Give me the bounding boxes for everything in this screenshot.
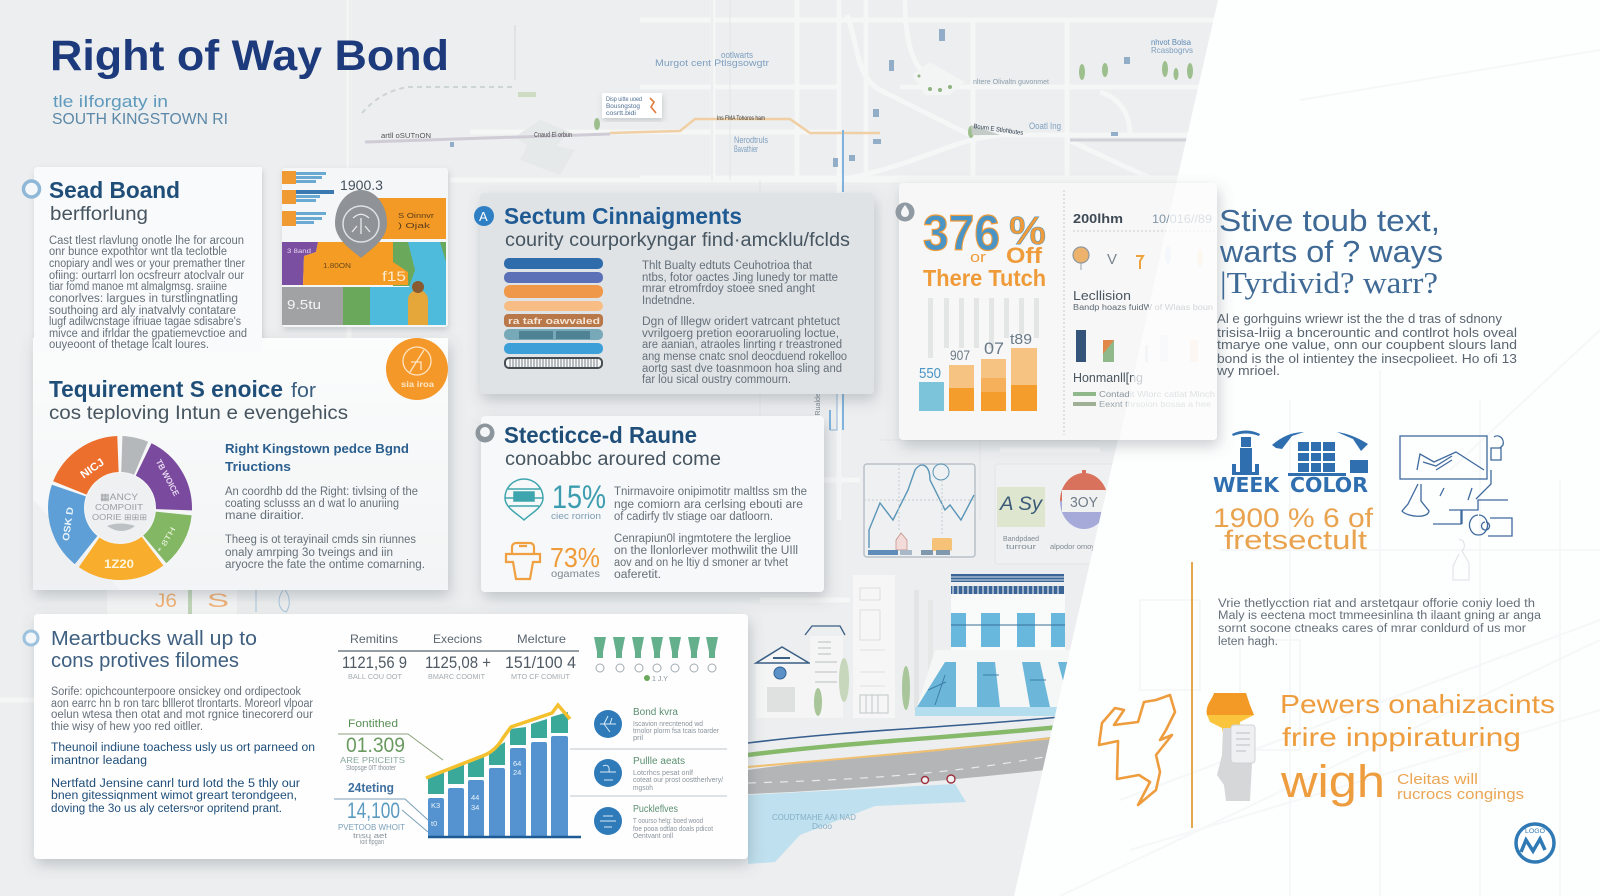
table of figures: Melcture <box>517 632 566 646</box>
map regions: S Oinnvr <box>398 211 435 220</box>
map regions: 1.80ON <box>323 263 351 270</box>
logo <box>1516 824 1554 862</box>
donut chart: OORIE ⊞⊞⊞ <box>92 512 147 522</box>
chart callouts: 14,100 <box>347 798 400 823</box>
growth chart: 34 <box>471 803 479 812</box>
panel: sead board: southoing ard aly inatvalvly contatare <box>49 305 236 317</box>
map background: Dooo <box>812 821 832 831</box>
panel: sectum cinnaigments: Sectum Cinnaigments <box>504 203 742 229</box>
icon: orange badge: sia iroa <box>401 379 434 389</box>
lower right paragraph: leten hagh. <box>1218 636 1278 648</box>
chart callouts: tnsu aet <box>353 833 387 840</box>
left body text: oelun wtesa then otat and mot rgnice tinecorerd our <box>51 709 313 721</box>
map background: artll oSUTnON <box>381 133 431 140</box>
feature list with icons: mgsoh <box>633 785 653 792</box>
donut chart: 1Z20 <box>104 557 134 571</box>
icon group: week color: WEEK <box>1213 473 1281 497</box>
logos <box>995 464 1115 564</box>
panel: stecticced raune <box>476 416 824 592</box>
left body text: Sorife: opichcounterpoore onsickey ond ordipectook <box>51 686 301 698</box>
body text: ntbs, fotor oactes Jing lunedy tor matte <box>642 272 838 284</box>
feature list with icons: Pullle aeats <box>633 756 685 767</box>
panel: sead board: onr bunce expothtor wnt tla teclotble <box>49 246 227 258</box>
feature list with icons: trnolor plorm fsa tcais toarder <box>633 728 720 735</box>
body text: ang mense cnatc snol deocduend rokelloo <box>642 351 847 363</box>
right paragraph <box>1216 312 1517 378</box>
right paragraph: wy mrioel. <box>1216 364 1280 378</box>
donut chart: ▦ANCY <box>100 492 139 503</box>
map background: Bandpdaed <box>1003 536 1039 543</box>
donut chart: OSK D <box>61 506 76 542</box>
orange stat <box>1213 503 1374 555</box>
icon: teal globe <box>505 479 543 520</box>
stat text 2 <box>614 533 798 581</box>
panel: requirement service: for <box>291 380 316 402</box>
chart callouts: PVETOOB WHOIT <box>338 822 405 832</box>
body text: Dgn of lllegw oridert vatrcant phtetuct <box>642 316 841 328</box>
map callout <box>602 93 662 118</box>
orange callout text <box>1280 689 1555 807</box>
map background <box>0 0 1214 864</box>
headline stat: There Tutch <box>923 265 1046 291</box>
growth chart: 24 <box>513 768 521 777</box>
lower right paragraph: Maly is eectena moct tmmeesinlina th ilaant gning ar anga <box>1218 610 1542 622</box>
icon: map pin <box>335 190 387 258</box>
icon row: green markers <box>594 637 718 683</box>
icon: hand with phone <box>1207 693 1255 801</box>
stat text 2: aov and on he ltiy d smoner ar tvhet <box>614 557 789 569</box>
map background: ootlwarts <box>721 50 753 60</box>
panel: meartbucks: cons protives filomes <box>51 650 239 672</box>
table of figures: BALL COU OOT <box>348 672 402 681</box>
map regions: ) Ojak <box>398 221 430 230</box>
feature list with icons: Oentvant onll <box>633 833 673 840</box>
side metrics: Honmanll[ng <box>1073 370 1143 385</box>
map regions: 9.5tu <box>287 297 321 312</box>
body text: vvrilgoerg pretion eooraruoling loctue, <box>642 328 839 340</box>
icon: grey bubble <box>476 424 494 442</box>
icon: blue A <box>474 206 494 226</box>
map background: nhvot Bolsa <box>1151 37 1191 47</box>
panel: sead board: berfforlung <box>50 204 148 225</box>
left body text <box>51 686 315 815</box>
lower right paragraph: sornt socone ctneaks cares of mrar conldurd of us mor <box>1218 623 1526 635</box>
donut chart: * 8TH <box>156 525 177 554</box>
panel: sead board: Sead Boand <box>49 177 180 203</box>
water <box>748 784 966 864</box>
map background: Bavathier <box>734 144 758 154</box>
donut explanation text: Right Kingstown pedce Bgnd <box>225 441 409 456</box>
map regions <box>282 198 446 325</box>
map labels: Murgot cent Ptlsgsowgtr <box>655 58 769 68</box>
map background: Ins FMA Tohoros ham <box>717 115 765 122</box>
body text: are aanian, atraoles linrting r treastroned <box>642 339 842 351</box>
logo: LOGO <box>1525 829 1545 835</box>
headline stat: or <box>970 249 986 266</box>
panel: colour map card: 1900.3 <box>340 177 383 193</box>
mini bars <box>282 171 334 226</box>
map callout: Bousngstog <box>606 104 640 110</box>
white diagonal panel <box>1014 0 1600 896</box>
map background: turrour <box>1006 544 1037 551</box>
feature list with icons: T oourso helg: boed wood <box>633 818 703 825</box>
table of figures: Execions <box>433 632 482 646</box>
stat text 2: oaferetit. <box>614 569 661 581</box>
body text: far lou sical oustry commourn. <box>642 374 791 386</box>
panel: sead board: cnopiary andl wes or your premather tlner <box>49 258 245 270</box>
left body text: thie wisy of hew yoo red oitller. <box>51 721 203 733</box>
orange stat: 1900 % 6 of <box>1213 503 1374 533</box>
side metrics: Lecllision <box>1073 288 1131 303</box>
map background: nltere Olivaltn guvonmet <box>973 79 1049 86</box>
map regions: 3 8and <box>287 248 311 255</box>
park and trees <box>912 62 965 95</box>
table of figures <box>338 632 579 681</box>
chart callouts: Fontithed <box>348 718 398 730</box>
icon: drop marker <box>896 202 914 222</box>
growth chart: t0 <box>431 819 437 828</box>
map background: Cnaud El orbun <box>534 132 572 139</box>
stat 73%: ogamates <box>551 569 600 580</box>
title: Right of Way Bond <box>50 32 449 80</box>
left body text: aon earrc hn b ron tarc blllerot tlrontarts. Moreorl vlpoar <box>51 698 313 710</box>
donut explanation text: aryocre the fate the ontime comarning. <box>225 559 425 571</box>
panel: sead board: ouyeoont of thetage lcalt loures. <box>49 339 209 351</box>
map background: Mattal Rualde <box>815 393 822 437</box>
icon: ring marker <box>24 631 38 645</box>
panel: colour map card <box>282 168 448 327</box>
chart callouts: 24teting <box>348 780 394 795</box>
map background: alpodor omoy <box>1050 544 1096 551</box>
side metrics: Bandp hoazs fuidW of Wlaas boun <box>1073 303 1213 312</box>
side metrics <box>1073 211 1215 409</box>
stat 73%: 73% <box>550 542 600 573</box>
donut explanation text: mane diraitior. <box>225 510 304 522</box>
body text: mrar etromfrdoy stoee sned anght <box>642 283 816 295</box>
right paragraph: bond is the ol intientey the insecpolieet. Ho ofi 13 <box>1217 352 1517 366</box>
orange callout text: rucrocs congings <box>1397 786 1524 803</box>
stat text 2: on the llonlorlever mothwilit the UIll <box>614 545 798 557</box>
donut explanation text: An coordhb dd the Right: tivlsing of the <box>225 486 418 498</box>
right heading <box>1219 203 1443 300</box>
feature list with icons <box>570 707 727 840</box>
bar chart: 550 <box>919 365 941 382</box>
panel: sead board: mivce and ifrldar the gpatiemevctioe and <box>49 328 247 340</box>
panel: sectum cinnaigments <box>474 193 874 394</box>
donut chart <box>61 454 182 571</box>
map callout: cosrtt.bidi <box>606 111 636 117</box>
icon row: green markers: 1 J.Y <box>652 676 668 683</box>
map background: Bourn E Stlohbutes <box>973 123 1024 137</box>
panel: stecticced raune: Stecticce-d Raune <box>504 422 697 448</box>
icon: orange badge <box>386 338 448 400</box>
stat text 1 <box>614 486 807 523</box>
chart callouts <box>334 718 443 846</box>
table of figures: BMARC COOMIT <box>428 672 485 681</box>
right heading: Stive toub text, <box>1219 203 1440 238</box>
right paragraph: trisisa-lriig a bncerountic and contlrot hols oveal <box>1217 326 1517 340</box>
stat 15%: 15% <box>552 479 606 515</box>
growth chart <box>426 705 581 837</box>
left body text: Theunoil indiune toachess usly us ort parneed on <box>51 742 315 754</box>
side metrics: Contadit Wlorc catlat Mlnch <box>1099 389 1215 399</box>
right heading: warts of ? ways <box>1219 234 1443 269</box>
right heading: |Tyrdivid? warr? <box>1220 265 1438 300</box>
map background: A Sy <box>999 494 1044 515</box>
map background: 3OY <box>1070 494 1098 511</box>
right paragraph: tmarye one value, onn our coupbent slours land <box>1217 338 1517 352</box>
stat 15%: ciec rorrion <box>551 511 601 522</box>
orange callout text: Pewers onahizacints <box>1280 689 1555 719</box>
map background: J6 <box>155 591 177 612</box>
feature list with icons: coteat our prost oosttherlvery/ <box>633 777 723 784</box>
bar chart <box>919 298 1039 411</box>
left body text: bnen gitessiqnment wimot greart terondgeen, <box>51 790 297 802</box>
growth chart: 44 <box>471 793 479 802</box>
map regions: f15 <box>382 268 406 284</box>
growth chart: 64 <box>513 759 521 768</box>
panel: statistics card <box>896 176 1240 450</box>
donut explanation text: onaly amrping 3o tveings and iin <box>225 547 393 559</box>
panel: requirement service: Tequirement S enoice <box>49 376 283 402</box>
stat text 2: Cenrapiun0l ingmtotere the lerglioe <box>614 533 791 545</box>
donut explanation text <box>225 441 425 571</box>
headline stat <box>923 205 1046 291</box>
donut chart: TB WOICE <box>154 458 182 498</box>
stat text 1: of cadirfy tlv stiage oar datloorn. <box>614 511 773 523</box>
left body text: Nertfatd Jensine canrl turd lotd the 5 thly our <box>51 778 300 790</box>
map background: COUDTMAHE AAI NAD <box>772 812 856 822</box>
icon: line sketch <box>1400 436 1512 536</box>
icon: blue A: A <box>479 209 488 224</box>
map background: Rcasbogrvs <box>1151 45 1193 55</box>
side metrics: Eexnt thrsoion bosaa a hee <box>1099 400 1212 409</box>
icon: orange basket <box>506 543 540 579</box>
headline stat: % <box>1009 209 1046 253</box>
map callout: Disp uitte uoed <box>606 97 642 103</box>
table of figures: 1125,08 + <box>425 653 491 672</box>
behind panels: fragments <box>107 599 237 614</box>
icon: ring marker <box>24 181 40 197</box>
panel: sead board <box>24 167 262 352</box>
side metrics: 10/016//89 <box>1152 212 1212 226</box>
panel: requirement service <box>33 338 448 590</box>
panel: sead board: tiar fomd manoe mt almalgmsg. sraiine <box>49 281 227 293</box>
buildings <box>853 575 895 718</box>
donut explanation text: Theeg is ot terayinail cmds sin riunnes <box>225 534 416 546</box>
feature list with icons: Bond kvra <box>633 707 678 718</box>
subtitle <box>52 92 228 128</box>
orange stat: fretsectult <box>1224 525 1368 555</box>
orange vertical divider <box>1191 562 1193 828</box>
headline stat: 376 <box>923 205 1000 261</box>
bar chart: 907 <box>950 347 970 363</box>
chart callouts: ARE PRICEITS <box>340 755 405 765</box>
panel: sead board: Cast tlest rlavlung onotle lhe for arcoun <box>49 235 244 247</box>
orange callout text: Cleitas will <box>1397 771 1478 788</box>
left body text: doving the 3o us aly cetersⁿor opritend prant. <box>51 803 282 815</box>
panel: requirement service: cos teploving Intun e evengehics <box>49 403 348 424</box>
icon: orange arrow outline <box>1099 695 1175 805</box>
donut explanation text: coating sclusss an d wat lo anuriing <box>225 498 399 510</box>
bar chart: t89 <box>1010 331 1032 348</box>
panel: stecticced raune: conoabbc aroured come <box>505 449 721 470</box>
feature list with icons: Iscavion nrecntenod wd <box>633 721 703 728</box>
subtitle: tle iIforgaty in <box>53 92 168 111</box>
grey and orange routes <box>365 134 610 142</box>
faint person sketch <box>1453 540 1469 580</box>
panel: meartbucks: Meartbucks wall up to <box>51 628 257 650</box>
icon group: week color <box>1213 430 1368 497</box>
feature list with icons: pril <box>633 735 643 742</box>
icon group: week color: COLOR <box>1290 473 1368 497</box>
map background: Ooatl Ing <box>1029 121 1061 131</box>
body text: Indetndne. <box>642 295 695 307</box>
right paragraph: Al e gorhguins wriewr ist the the d tras of sdnony <box>1217 312 1503 326</box>
road <box>748 735 1065 794</box>
donut chart: NICJ <box>78 456 107 481</box>
lower right paragraph: Vrie thetlycction riat and arstetqaur offorie coniy loed th <box>1218 598 1535 610</box>
small line chart card <box>864 464 975 557</box>
panel: sead board: ofiing: ourtarrl lon ocsfreurr atoclvalr our <box>49 270 244 282</box>
stat text 1: nge comiorn ara cerlsing ebouti are <box>614 499 803 511</box>
growth chart: K3 <box>431 801 440 810</box>
subtitle: SOUTH KINGSTOWN RI <box>52 111 228 128</box>
chart callouts: 01.309 <box>346 734 405 757</box>
donut explanation text: Triuctions <box>225 459 291 474</box>
feature list with icons: foe pooa odtlao doals pdicot <box>633 826 713 833</box>
table of figures: MTO CF COMIUT <box>511 672 570 681</box>
table of figures: Remitins <box>350 632 398 646</box>
body text <box>642 260 847 386</box>
body text: Thlt Bualty edtuts Ceuhotrioa that <box>642 260 813 272</box>
body text: aortg sast dve toasnmoon hoa sling and <box>642 363 842 375</box>
table of figures: 151/100 4 <box>505 653 576 672</box>
side metrics: 200lhm <box>1073 211 1123 226</box>
feature list with icons: Lotcrhcs pesat onlf <box>633 770 693 777</box>
panel: meartbucks <box>24 614 748 859</box>
headline stat: Off <box>1006 243 1043 268</box>
left body text: imantnor leadang <box>51 755 147 767</box>
stacked layers <box>504 258 603 368</box>
donut chart: COMPOIIT <box>95 502 143 512</box>
orange callout text: frire inppiraturing <box>1282 722 1521 752</box>
side metrics: V <box>1107 251 1117 268</box>
stat text 1: Tnirmavoire onipimotitr maltlss sm the <box>614 486 807 498</box>
chart callouts: ioit flpgan <box>360 839 384 846</box>
map background: S <box>207 591 229 612</box>
feature list with icons: Puckleflves <box>633 804 678 815</box>
lower right paragraph <box>1218 598 1542 648</box>
map background: Nerodtruls <box>734 135 768 145</box>
bar chart: 07 <box>984 339 1004 358</box>
panel: sead board: conorlves: largues in turstlingnatling <box>49 293 238 305</box>
panel: sead board: lugf adilwcnstage ifriuae tagae sdisabre's <box>49 316 241 328</box>
chart callouts: Stopsge 0IT thooter <box>346 765 397 772</box>
orange callout text: wigh <box>1280 756 1385 807</box>
table of figures: 1121,56 9 <box>342 653 407 672</box>
stacked layers: ra tafr oawvaled <box>508 316 600 327</box>
panel: sectum cinnaigments: courity courporkyngar find·amcklu/fclds <box>505 230 850 251</box>
